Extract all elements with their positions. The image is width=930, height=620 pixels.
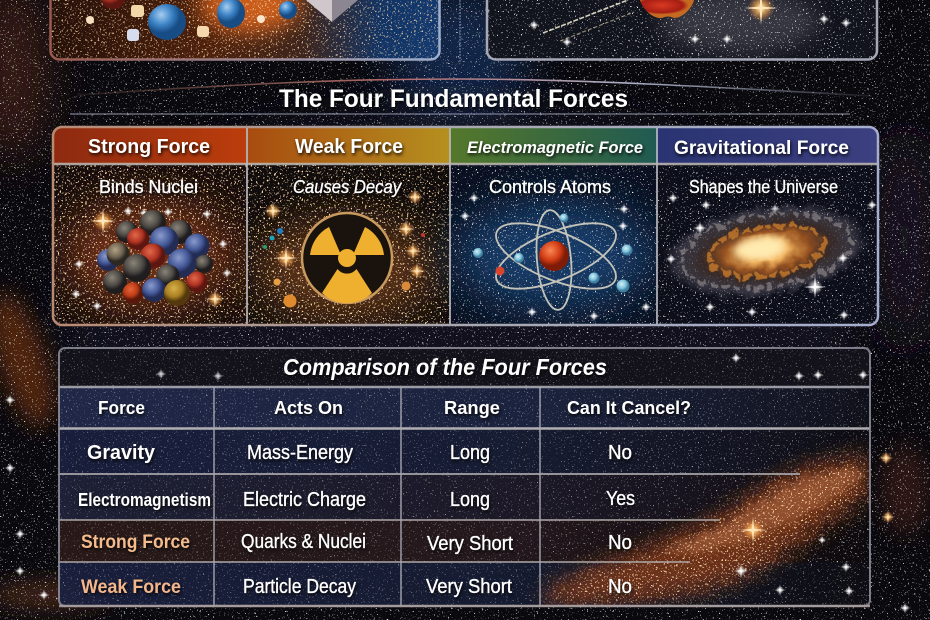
card: gravitational force [657,127,878,325]
card dividers and border [53,127,878,325]
table row: electromagnetism: Long [450,489,490,511]
card subheadings: Binds Nuclei [99,177,198,197]
table header row: Force [98,398,145,418]
card subheadings: Causes Decay [293,177,402,197]
bright star [744,0,778,25]
table row: weak force: Particle Decay [243,576,356,598]
title arc above heading [77,79,872,96]
table header row: Acts On [274,398,343,418]
table row: strong force [81,531,632,555]
icon: nucleus cluster [97,210,213,306]
panel: four forces [53,127,878,325]
table row: strong force: No [608,532,632,554]
table row: weak force: No [608,576,632,598]
panel: top left, particles [50,0,440,60]
table row: electromagnetism: Electromagnetism [78,490,211,510]
card: electromagnetic force [450,127,657,325]
card subheadings: Shapes the Universe [689,177,838,197]
table row: gravity [87,442,632,464]
icon: spiral galaxy [657,191,876,311]
table header row [98,398,691,418]
card subheadings: Controls Atoms [489,177,611,197]
title rule below heading [70,113,850,115]
card: weak force [247,127,450,325]
icon: red apple [640,0,694,18]
card headings [88,136,849,159]
table row: weak force: Very Short [426,576,512,598]
panel: comparison table [59,348,870,606]
panel border: top left [50,0,440,60]
card headings: Weak Force [295,136,403,158]
panel border: top right [487,0,877,60]
card: strong force [53,127,247,325]
table row: electromagnetism: Yes [606,488,635,510]
table row: strong force: Quarks & Nuclei [241,531,366,553]
table row: electromagnetism: Electric Charge [243,489,366,511]
panel: top right, gravity apple [486,0,878,60]
icon: white cube [306,0,358,22]
table row: gravity: No [608,442,632,464]
title: The Four Fundamental Forces [279,85,628,113]
table row: weak force: Weak Force [81,577,181,598]
nebula band in table [540,430,870,606]
table row: gravity: Mass-Energy [247,442,353,464]
card subheadings [99,177,838,197]
icon: atom [473,209,632,311]
table row: strong force: Very Short [427,533,513,555]
table row: gravity: Long [450,442,490,464]
card headings: Strong Force [88,136,210,158]
icon: radiation symbol [302,213,392,303]
table row: gravity: Gravity [87,442,156,464]
center vertical divider line [459,0,461,62]
icon: particle spheres [86,0,297,41]
table grid lines [59,348,870,606]
card headings: Gravitational Force [674,138,849,159]
table row: weak force [81,576,632,598]
table row: electromagnetism [78,488,635,511]
table header row: Range [444,398,500,418]
table title: Comparison of the Four Forces [283,354,607,380]
table row: strong force: Strong Force [81,532,190,553]
galaxy foreground stars [665,221,850,298]
card headings: Electromagnetic Force [467,138,643,157]
table header row: Can It Cancel? [567,398,691,418]
icon: motion streaks [543,0,634,41]
